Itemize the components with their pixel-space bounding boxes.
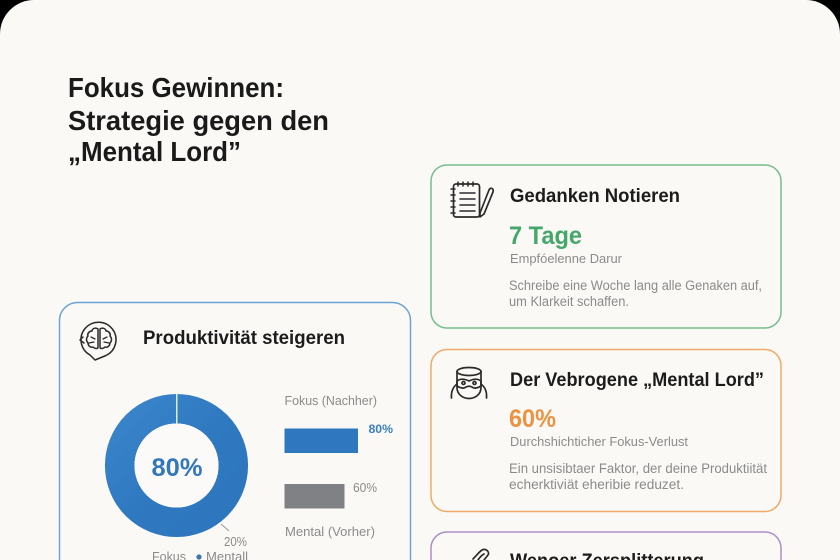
panel: Gedanken Notieren xyxy=(431,165,781,328)
icon: brain in speech bubble xyxy=(80,322,116,360)
card stat label: Durchshichticher Fokus-Verlust xyxy=(510,435,689,449)
card stat: 60% xyxy=(509,405,556,433)
donut leader and 20% label xyxy=(221,524,247,549)
card stat: 7 Tage xyxy=(509,222,582,250)
card description: um Klarkeit schaffen. xyxy=(509,294,629,309)
title: Strategie gegen den xyxy=(68,105,329,136)
card description: Ein unsisibtaer Faktor, der deine Produktiität xyxy=(509,461,767,476)
card description: Schreibe eine Woche lang alle Genaken auf, xyxy=(509,278,762,293)
card description xyxy=(509,461,767,492)
title: Fokus Gewinnen: xyxy=(68,72,284,103)
bar chart: 60% xyxy=(353,481,377,495)
donut legend xyxy=(152,550,248,560)
bar chart: 80% xyxy=(368,422,393,436)
card description: echerktiviät eheribie reduzet. xyxy=(509,477,684,492)
bar chart xyxy=(284,394,393,539)
card heading: Der Vebrogene „Mental Lord” xyxy=(510,370,764,391)
bar chart: Mental (Vorher) xyxy=(285,525,375,539)
donut chart xyxy=(120,394,247,549)
donut leader and 20% label: 20% xyxy=(224,535,247,549)
title: „Mental Lord” xyxy=(68,136,241,167)
icon: notepad and pen xyxy=(451,182,493,217)
donut value: 80% xyxy=(152,454,202,482)
bar chart: Fokus (Nachher) xyxy=(284,394,377,408)
icon: masked figure xyxy=(451,368,487,398)
card heading: Gedanken Notieren xyxy=(510,186,680,207)
title xyxy=(68,72,329,167)
panel heading: Produktivität steigeren xyxy=(143,328,345,349)
panel: Produktivität steigeren xyxy=(60,302,410,560)
icon: paperclip xyxy=(473,549,489,560)
card stat label: Empfóelenne Darur xyxy=(510,252,622,266)
panel: Der Vebrogene Mental Lord xyxy=(431,350,781,512)
panel: Weniger Zersplitterung xyxy=(431,532,781,560)
card description xyxy=(509,278,762,309)
